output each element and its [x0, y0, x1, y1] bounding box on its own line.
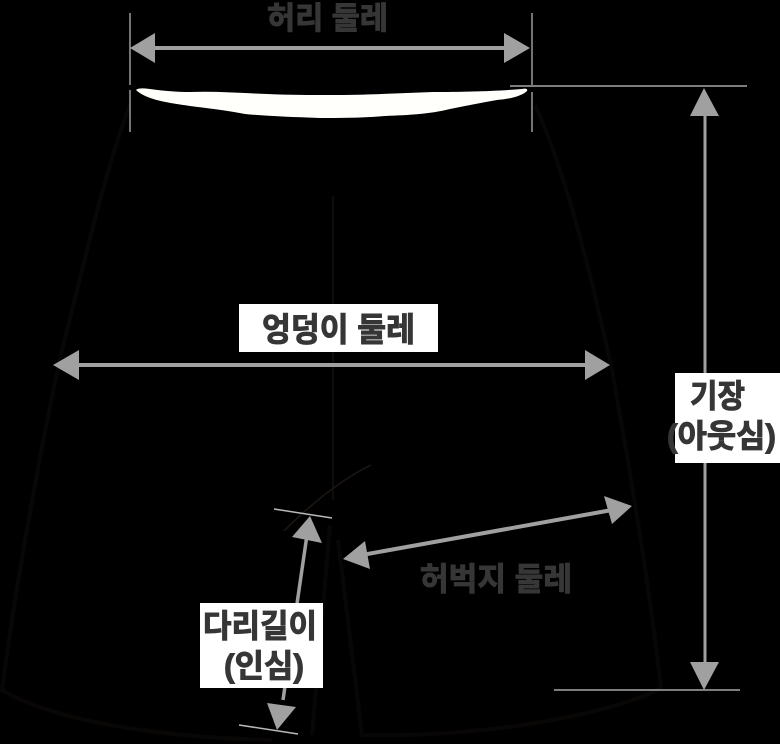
total length label: 기장 — [690, 378, 745, 414]
waistband opening — [136, 88, 527, 118]
inseam label: 다리길이 — [203, 608, 317, 644]
hip label — [239, 304, 438, 352]
inseam label: (인심) — [224, 648, 304, 684]
inseam label — [200, 603, 323, 688]
waist measurement arrow — [130, 13, 532, 132]
total length label: (아웃심) — [667, 418, 776, 454]
thigh label: 허벅지 둘레 — [420, 561, 572, 597]
hip measurement arrow — [53, 350, 610, 380]
shorts outline — [2, 105, 661, 740]
hip label: 엉덩이 둘레 — [262, 311, 415, 348]
total length label — [667, 373, 780, 463]
inseam measurement arrow — [239, 509, 332, 734]
total length arrow — [510, 86, 747, 690]
waist label: 허리 둘레 — [267, 1, 388, 36]
thigh measurement arrow — [343, 496, 632, 569]
